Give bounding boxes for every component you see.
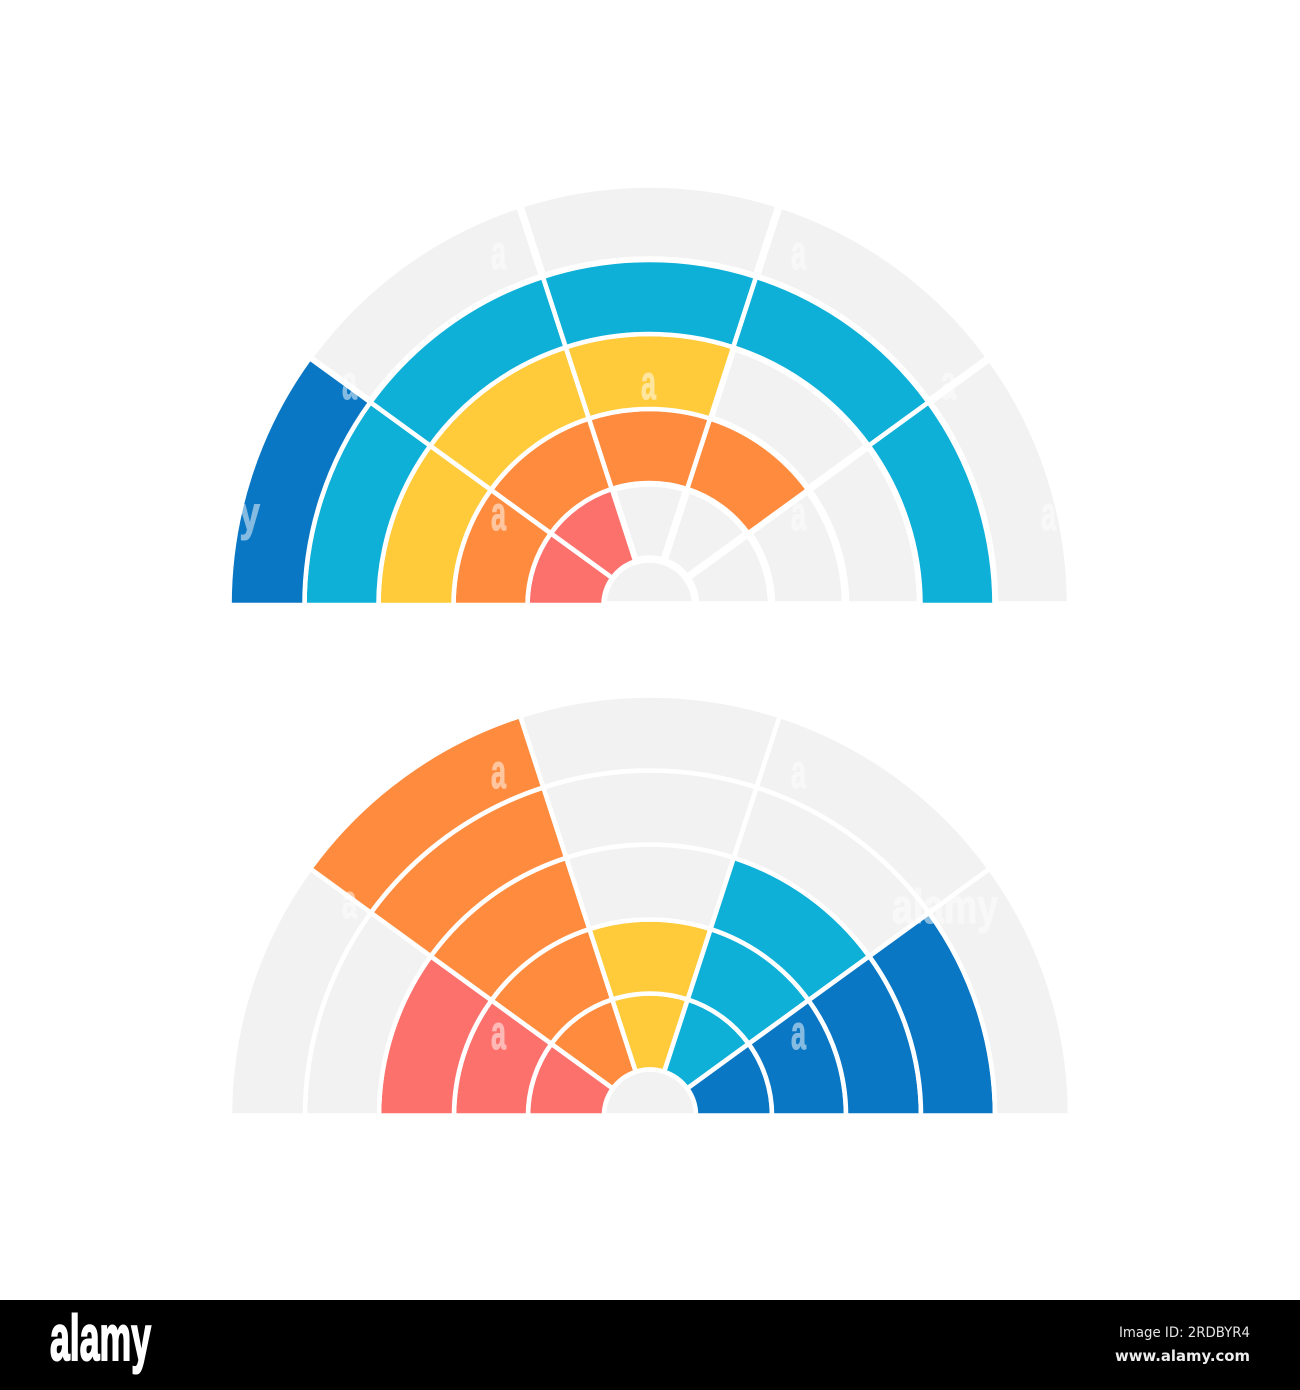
watermarks: a [491,488,506,541]
website address: www.alamy.com [1115,1347,1250,1365]
ring 5: blue segment [230,358,370,605]
sector 4: teal segments [661,716,1015,1156]
watermarks: a [641,357,656,410]
footer logo: alamy [50,1302,151,1374]
watermarks: a [491,746,506,799]
watermarks: a [1041,488,1056,541]
watermarks: a [791,1007,806,1060]
sector 3: yellow segments [520,640,873,1080]
chart: top semicircular segmented chart [230,128,1136,641]
watermarks: a [342,357,357,410]
watermarks: a [791,746,806,799]
sector 5: blue segments [680,869,1135,1293]
watermarks: a [941,357,956,410]
footer bar [0,1300,1300,1390]
sector 1: red segments [230,869,613,1116]
sector 2: orange segments [310,669,765,1094]
watermarks: a [491,227,506,280]
chart: bottom semicircular segmented chart [230,640,1135,1293]
watermarks: a [791,488,806,541]
ring 2: orange segments [454,383,820,605]
grey unfilled segments and hub [309,128,1136,641]
watermarks: alamy [892,881,998,934]
ring 3: yellow segments [378,298,752,605]
watermarks: a [342,876,357,929]
hub: bottom chart centre [604,1070,696,1116]
watermarks: alamy [155,488,260,541]
image id: Image ID: 2RDBYR4 [1119,1325,1250,1341]
watermarks: a [491,1007,506,1060]
watermarks: a [791,227,806,280]
ring 1: red segments [528,475,662,605]
watermarks [155,227,1056,1060]
ring 4: teal segments [304,214,1048,640]
